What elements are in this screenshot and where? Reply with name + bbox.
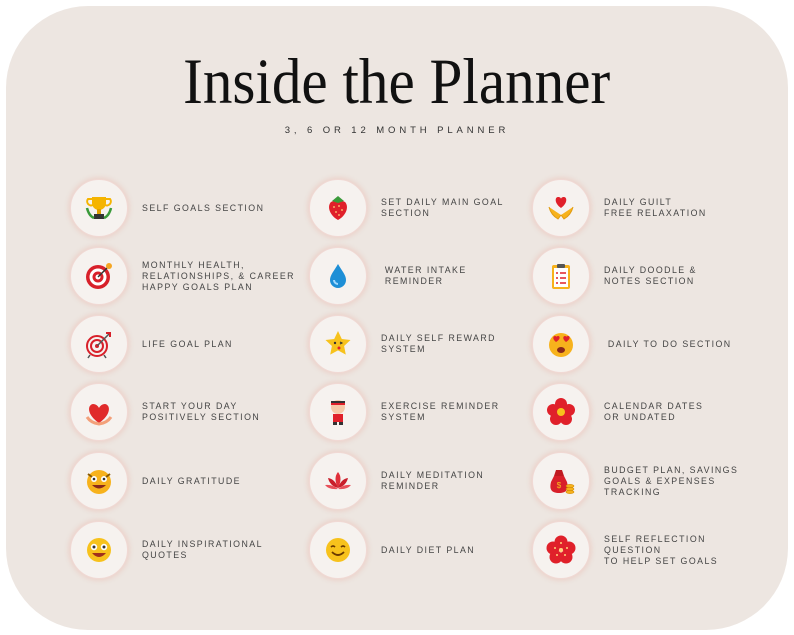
item: self reflection: SELF REFLECTION: [604, 534, 706, 544]
item: gratitude: [68, 450, 241, 512]
item: water intake: [306, 244, 467, 308]
item: calendar dates: OR UNDATED: [604, 412, 676, 422]
item: doodle notes: [530, 244, 697, 308]
item: monthly health: [68, 244, 295, 308]
item: exercise: [306, 380, 500, 444]
item: guilt free relaxation: [530, 176, 707, 240]
item: monthly health: RELATIONSHIPS, & CAREER: [142, 270, 295, 280]
item: start your day: START YOUR DAY: [142, 401, 238, 411]
item: life goal: [68, 312, 233, 376]
item: monthly health: MONTHLY HEALTH,: [142, 260, 245, 270]
item: self reflection: [530, 518, 718, 582]
item: exercise: SYSTEM: [381, 412, 426, 422]
item: meditation: DAILY MEDITATION: [381, 470, 484, 480]
title: Inside the Planner: [183, 46, 611, 118]
item: start your day: POSITIVELY SECTION: [142, 412, 260, 422]
item: guilt free relaxation: FREE RELAXATION: [604, 208, 707, 218]
subtitle: 3, 6 OR 12 MONTH PLANNER: [285, 125, 509, 136]
item: diet plan: [306, 518, 475, 582]
item: calendar dates: [530, 380, 703, 444]
item: inspirational quotes: DAILY INSPIRATIONAL: [142, 539, 263, 549]
item: guilt free relaxation: DAILY GUILT: [604, 197, 672, 207]
item: monthly health: HAPPY GOALS PLAN: [142, 282, 253, 292]
item: exercise: EXERCISE REMINDER: [381, 401, 500, 411]
item: self reward: SYSTEM: [381, 344, 426, 354]
item: to do: [530, 312, 732, 376]
item: water intake: REMINDER: [385, 276, 443, 286]
item: daily main goal: SECTION: [381, 208, 430, 218]
item: budget: GOALS & EXPENSES: [604, 476, 716, 486]
item: life goal: LIFE GOAL PLAN: [142, 338, 233, 348]
item: self reward: DAILY SELF REWARD: [381, 333, 496, 343]
item: self reflection: QUESTION: [604, 544, 662, 554]
item: self reward: [306, 312, 496, 376]
item: self goals: [68, 176, 264, 240]
item: daily main goal: SET DAILY MAIN GOAL: [381, 197, 504, 207]
item: budget: TRACKING: [604, 486, 661, 496]
item: meditation: [306, 450, 484, 512]
item: diet plan: DAILY DIET PLAN: [381, 544, 475, 554]
item: self goals: SELF GOALS SECTION: [142, 202, 264, 212]
item: to do: DAILY TO DO SECTION: [608, 338, 732, 348]
item: daily main goal: [306, 176, 504, 240]
item: start your day: [68, 380, 260, 444]
item: gratitude: DAILY GRATITUDE: [142, 476, 241, 486]
item: calendar dates: CALENDAR DATES: [604, 401, 703, 411]
item: budget: [530, 450, 738, 512]
item: doodle notes: NOTES SECTION: [604, 276, 695, 286]
item: inspirational quotes: [68, 518, 263, 582]
item: budget: BUDGET PLAN, SAVINGS: [604, 464, 738, 474]
item: inspirational quotes: QUOTES: [142, 550, 188, 560]
item: self reflection: TO HELP SET GOALS: [604, 556, 718, 566]
item: water intake: WATER INTAKE: [385, 265, 467, 275]
item: doodle notes: DAILY DOODLE &: [604, 265, 697, 275]
item: meditation: REMINDER: [381, 481, 440, 491]
item: budget: $: [557, 481, 562, 490]
